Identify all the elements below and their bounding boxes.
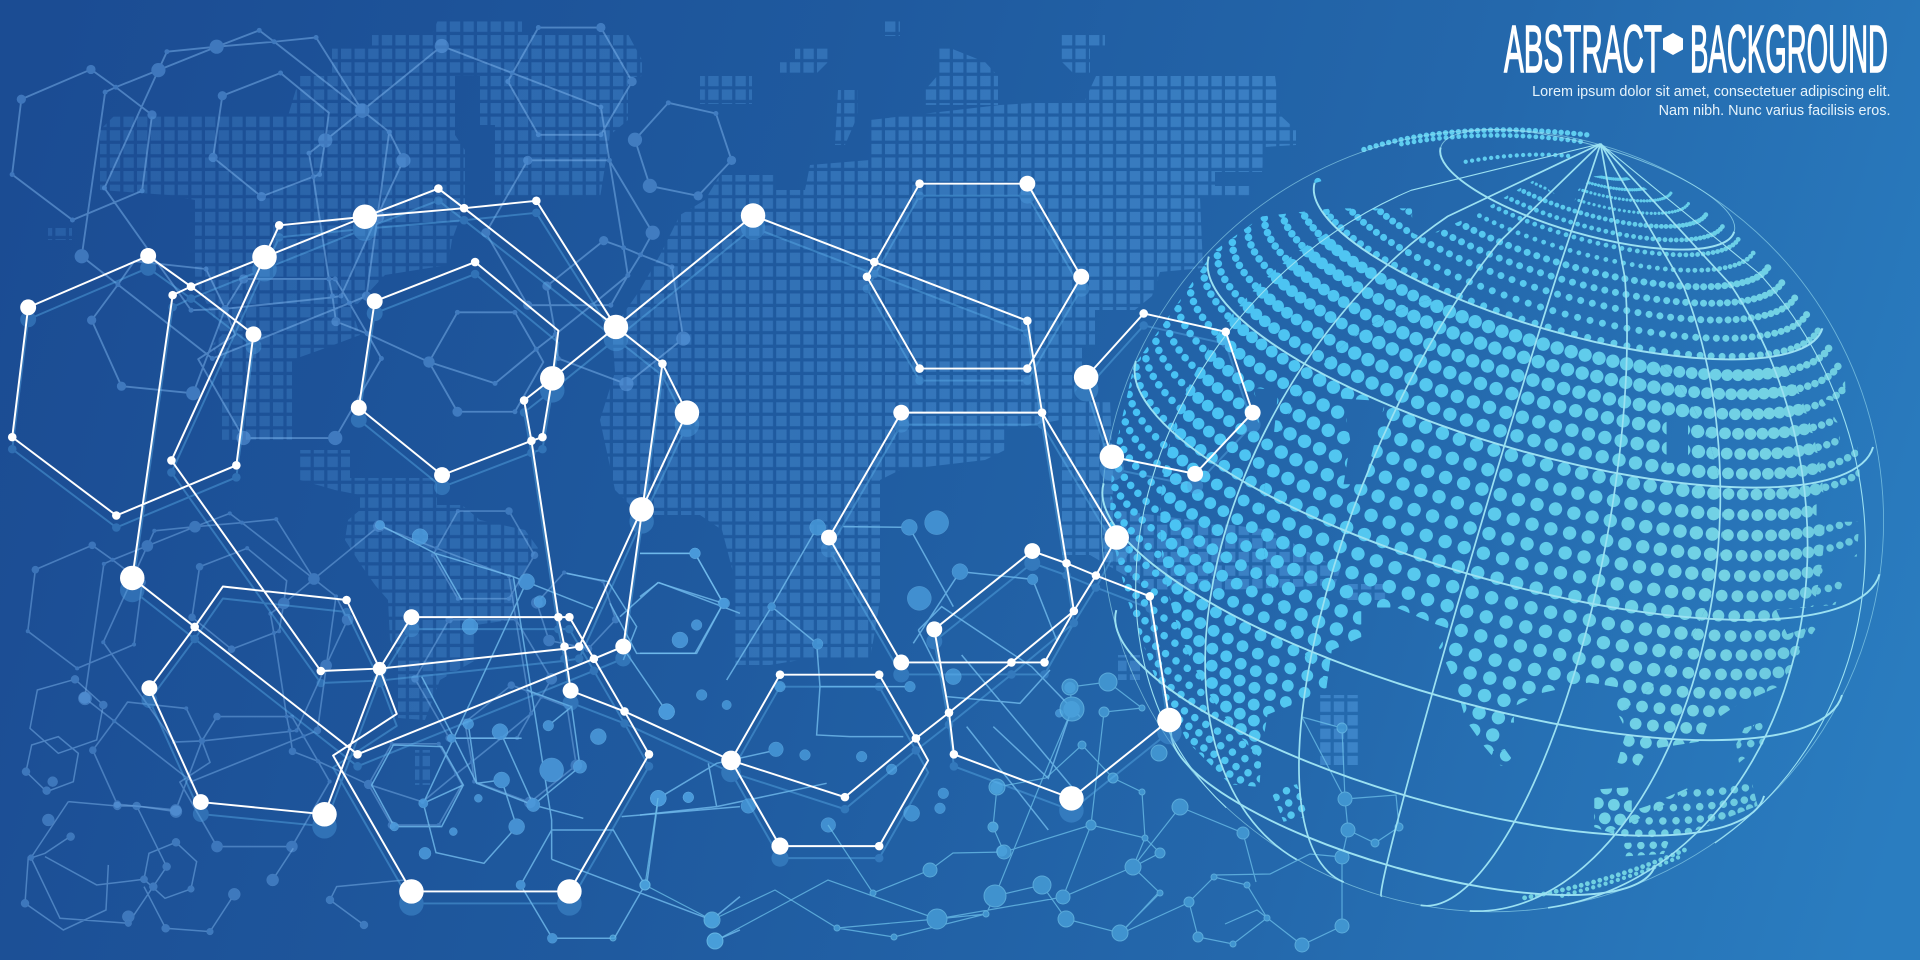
faint network: centre right [640,511,1080,856]
dotted world map [48,22,1385,785]
title block [1504,12,1890,119]
white network shadow [8,188,1261,916]
globe: wireframe [1009,36,1920,960]
globe [1009,36,1920,960]
faint network: small hexagons at lower left [21,675,405,935]
faint background networks [10,23,1403,952]
white hexagon network [8,176,1261,904]
subtitle line 1: Lorem ipsum dolor sit amet, consectetuer adipiscing elit. [1532,84,1890,100]
subtitle line 2: Nam nibh. Nunc varius facilisis eros. [1659,103,1890,119]
faint network: lower left [26,507,620,852]
faint network: lower centre [372,520,740,949]
globe: latitude lines [1021,40,1920,960]
globe: dotted limb strips at top and bottom [1364,130,1685,898]
icon: hexagon separator [1663,33,1683,55]
globe: outline [1009,37,1920,960]
faint network: upper left [10,23,736,445]
title block: ABSTRACT [1504,12,1662,87]
globe: continents of dots [1012,56,1920,960]
globe: meridian lines [1059,50,1920,960]
faint network: lower right [610,673,1403,952]
